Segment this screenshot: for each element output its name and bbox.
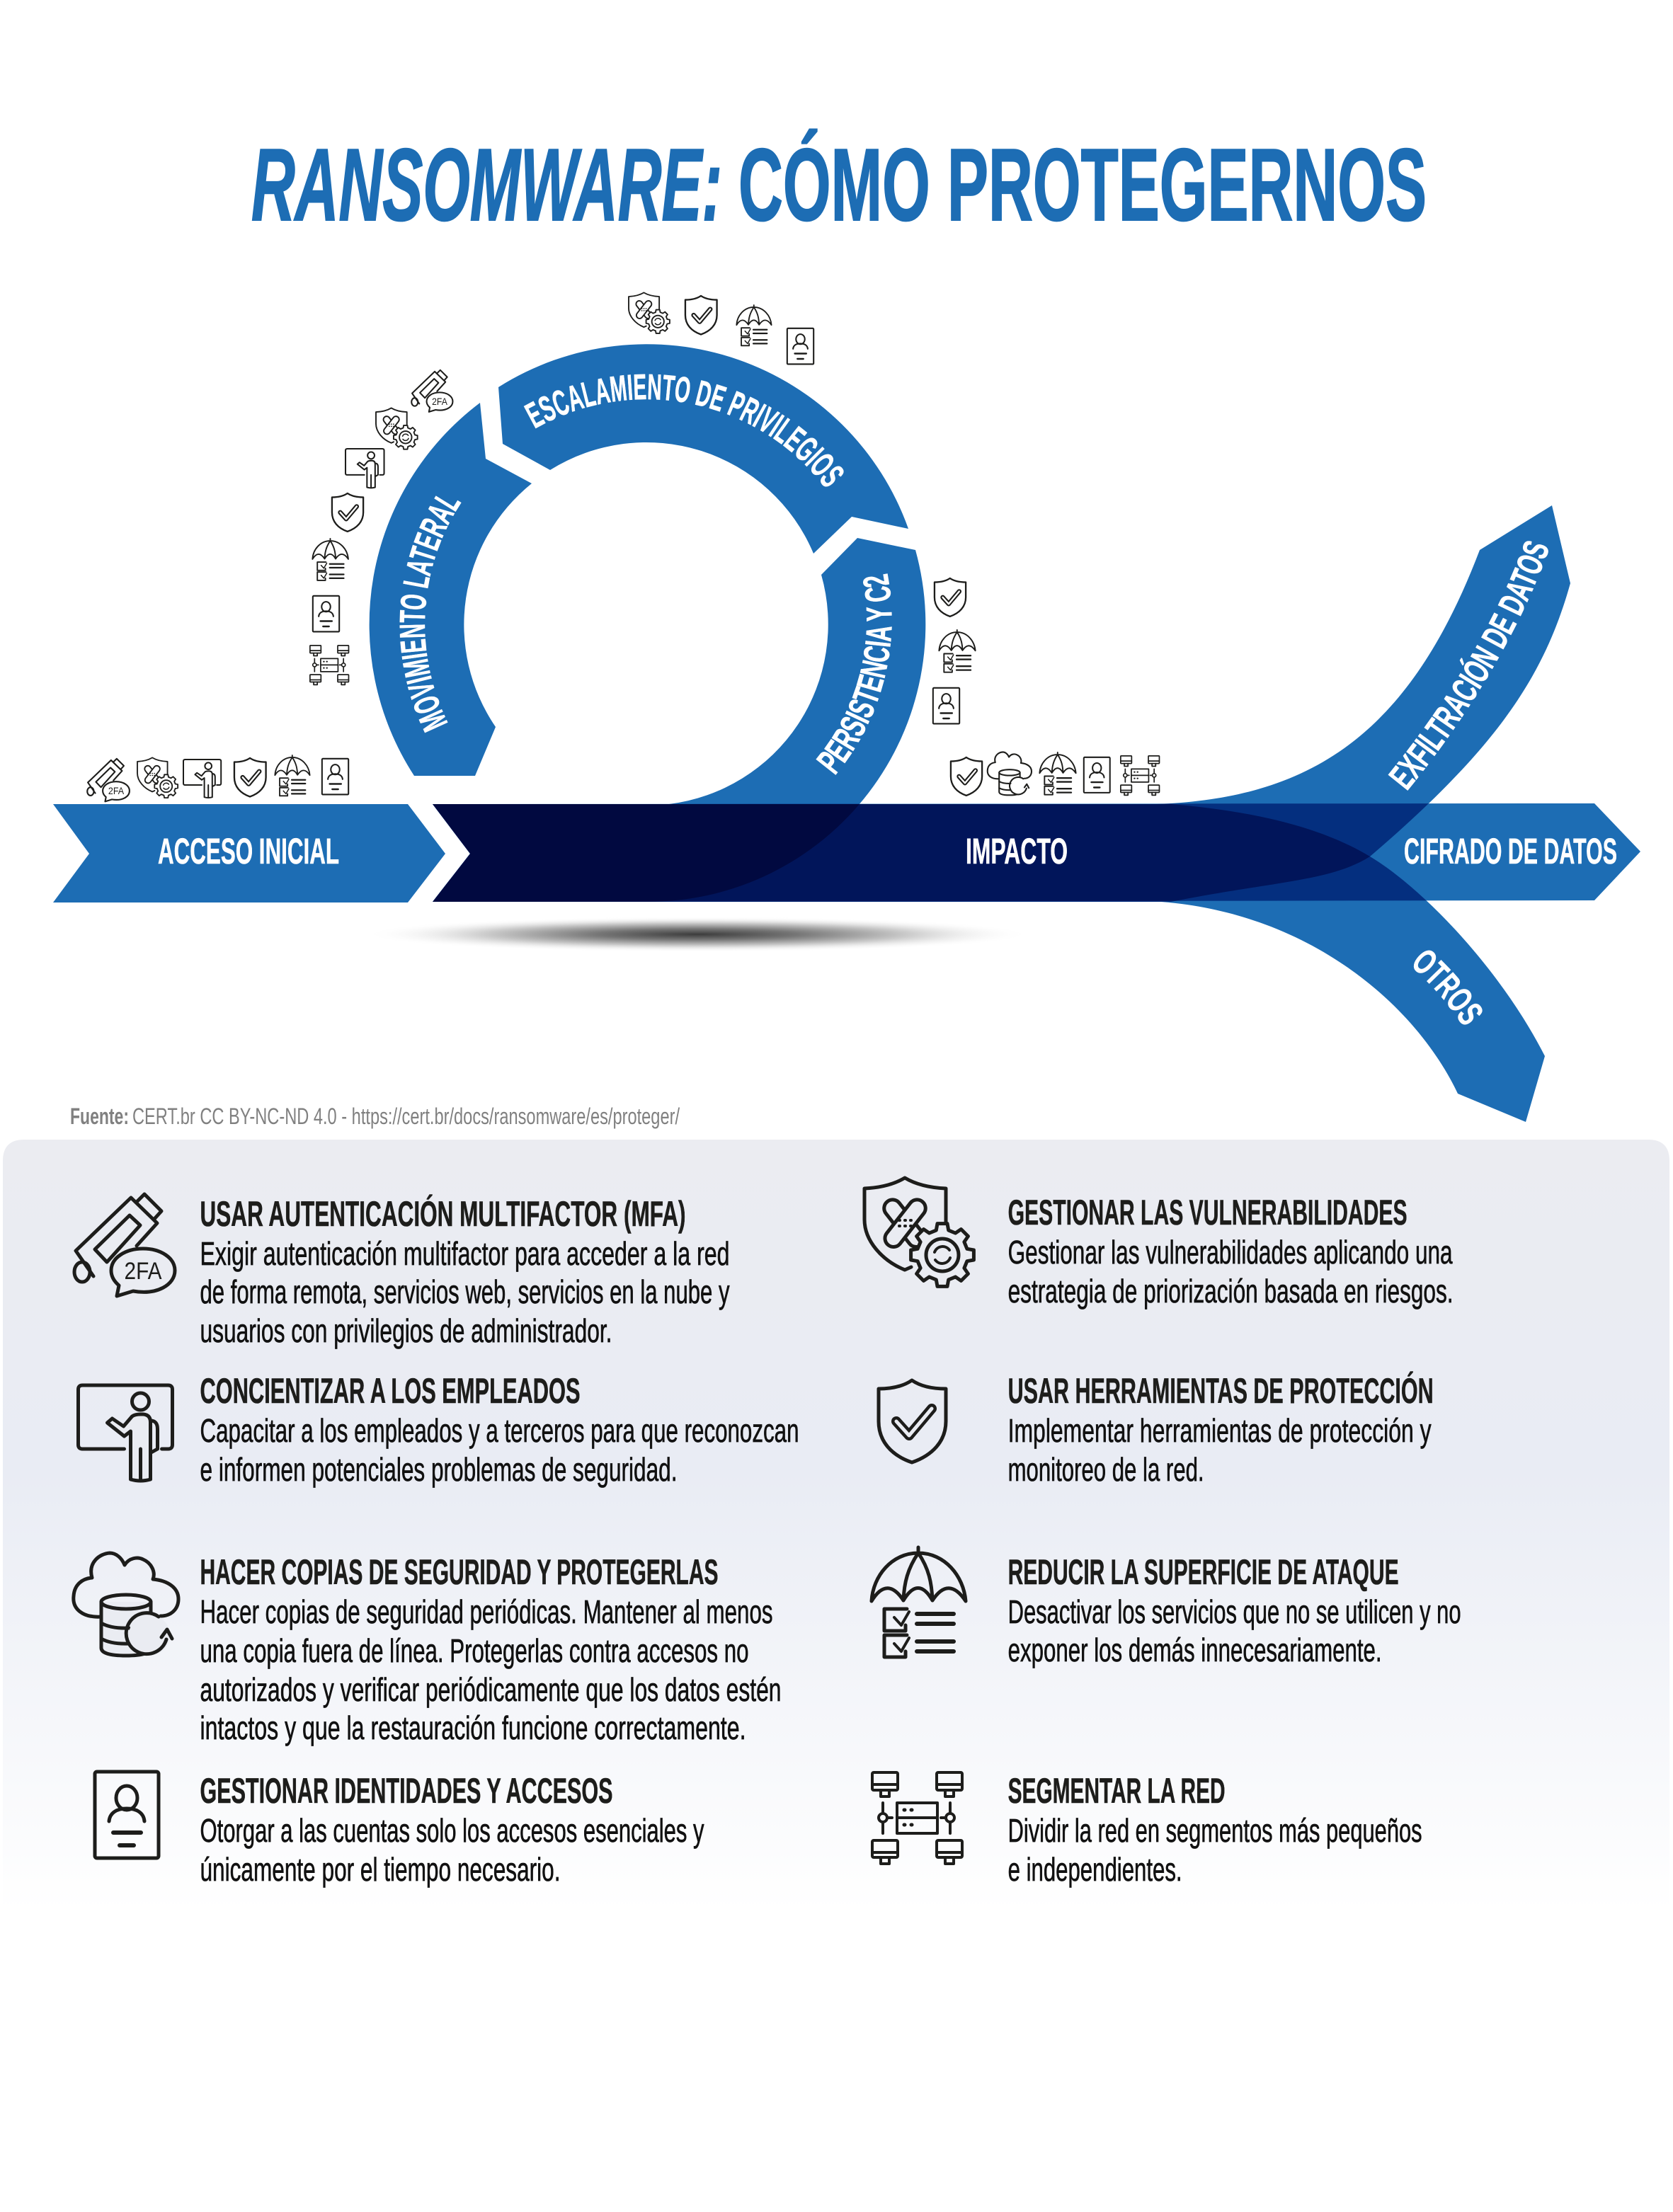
text block: [1008, 1812, 1422, 1888]
label: otros: OTROS: [1413, 950, 1483, 1025]
panel: recommendations background: [3, 1140, 1669, 1911]
text block: Desactivar los servicios que no se utilicen y no: [1008, 1593, 1461, 1630]
label: impacto: IMPACTO: [966, 831, 1068, 871]
icons: persistencia column: [933, 578, 976, 723]
text block: intactos y que la restauración funcione correctamente.: [200, 1709, 746, 1746]
icon: shield check: [879, 1380, 946, 1462]
panel: recommendations: [74, 1178, 1461, 1888]
icon: id card: [1084, 757, 1110, 793]
icon: id card: [322, 759, 348, 794]
item: MFA: [74, 1194, 729, 1349]
icon: umbrella checklist: [312, 539, 348, 580]
title: RANSOMWARE:: [251, 127, 722, 242]
text block: una copia fuera de línea. Protegerlas contra accesos no: [200, 1632, 749, 1669]
heading: HACER COPIAS DE SEGURIDAD Y PROTEGERLAS: [200, 1552, 719, 1592]
text block: usuarios con privilegios de administrador.: [200, 1312, 612, 1349]
icon: umbrella checklist: [872, 1547, 966, 1657]
heading: GESTIONAR IDENTIDADES Y ACCESOS: [200, 1771, 613, 1811]
item: attack surface: [872, 1547, 1461, 1668]
title: [251, 127, 1427, 242]
arrow: acceso inicial: [53, 804, 445, 902]
icon: network: [872, 1772, 962, 1864]
label: acceso inicial: ACCESO INICIAL: [158, 831, 339, 871]
icon: shield check: [935, 578, 966, 617]
icons: impacto row: [951, 752, 1159, 796]
icon: cloud database: [74, 1553, 178, 1656]
icon: umbrella checklist: [1039, 752, 1076, 795]
icon: 2FA key: 2FA: [108, 786, 125, 797]
item: protection tools: [879, 1371, 1434, 1488]
arc: escalamiento de privilegios: [498, 344, 908, 554]
icon: 2FA key: [411, 370, 452, 412]
icons: escalamiento row: [629, 292, 813, 364]
icons: movimiento lateral column: [310, 370, 452, 684]
text block: [200, 1812, 704, 1888]
text block: autorizados y verificar periódicamente que los datos estén: [200, 1671, 782, 1708]
icon: 2FA key: 2FA: [125, 1258, 162, 1285]
icon: cloud database: [988, 752, 1032, 795]
item: segment network: [872, 1771, 1422, 1888]
label: movimiento lateral: MOVIMIENTO LATERAL: [399, 495, 462, 733]
text block: Hacer copias de seguridad periódicas. Mantener al menos: [200, 1593, 773, 1630]
icon: umbrella checklist: [939, 630, 976, 672]
text block: [1008, 1234, 1454, 1310]
text block: de forma remota, servicios web, servicios en la nube y: [200, 1273, 729, 1310]
label: persistencia y C2: PERSISTENCIA Y C2: [816, 573, 892, 775]
heading: USAR AUTENTICACIÓN MULTIFACTOR (MFA): [200, 1194, 685, 1234]
source line: [70, 1104, 680, 1129]
text block: Capacitar a los empleados y a terceros para que reconozcan: [200, 1412, 799, 1449]
source line: CERT.br CC BY-NC-ND 4.0 - https://cert.br/docs/ransomware/es/proteger/: [132, 1104, 680, 1129]
text block: Dividir la red en segmentos más pequeños: [1008, 1812, 1422, 1849]
icon: umbrella checklist: [275, 755, 310, 796]
icon: shield with gear: [376, 408, 418, 449]
icon: presenter: [78, 1385, 173, 1481]
item: awareness: [78, 1371, 799, 1488]
icon: shield check: [234, 758, 266, 796]
label: escalamiento de privilegios: ESCALAMIENTO DE PRIVILEGIOS: [524, 374, 844, 487]
text block: únicamente por el tiempo necesario.: [200, 1851, 561, 1888]
text block: estrategia de priorización basada en riesgos.: [1008, 1273, 1454, 1310]
arrow: exfiltracion de datos: [433, 505, 1570, 902]
icon: id card: [313, 596, 339, 631]
icon: presenter: [183, 760, 221, 798]
text block: [200, 1235, 729, 1349]
arrow: otros: [433, 804, 1545, 1122]
label: exfiltracion de datos: EXFILTRACIÓN DE DATOS: [1388, 541, 1548, 791]
icon: id card: [933, 688, 959, 723]
icons: acceso inicial row: [87, 755, 348, 801]
item: vulnerabilities: [864, 1178, 1454, 1310]
heading: CONCIENTIZAR A LOS EMPLEADOS: [200, 1371, 581, 1411]
item: backups: [74, 1552, 781, 1746]
icon: presenter: [346, 449, 384, 488]
icon: id card: [787, 328, 813, 364]
arc: persistencia y C2: [433, 538, 925, 902]
icon: id card: [95, 1772, 159, 1858]
icon: shield check: [951, 757, 982, 796]
icon: 2FA key: 2FA: [432, 396, 447, 407]
text block: e informen potenciales problemas de seguridad.: [200, 1451, 677, 1488]
text block: Exigir autenticación multifactor para acceder a la red: [200, 1235, 729, 1272]
text block: [1008, 1593, 1461, 1668]
icon: shield with gear: [864, 1178, 973, 1286]
source line: Fuente:: [70, 1104, 129, 1129]
arrow: cifrado de datos: [433, 803, 1640, 902]
icon: umbrella checklist: [736, 305, 772, 345]
arc: movimiento lateral: [370, 403, 532, 776]
icon: 2FA key: [87, 759, 130, 801]
heading: GESTIONAR LAS VULNERABILIDADES: [1008, 1193, 1408, 1232]
heading: REDUCIR LA SUPERFICIE DE ATAQUE: [1008, 1552, 1399, 1592]
icon: 2FA key: [74, 1194, 175, 1296]
icon: shield check: [685, 296, 717, 334]
icon: network: [1121, 756, 1159, 795]
heading: SEGMENTAR LA RED: [1008, 1771, 1226, 1811]
text block: Otorgar a las cuentas solo los accesos esenciales y: [200, 1812, 704, 1849]
text block: [1008, 1412, 1432, 1488]
icon: shield with gear: [137, 757, 178, 798]
text block: Gestionar las vulnerabilidades aplicando una: [1008, 1234, 1453, 1271]
text block: monitoreo de la red.: [1008, 1451, 1204, 1488]
icon: shield check: [332, 493, 363, 532]
text block: e independientes.: [1008, 1851, 1182, 1888]
icon: shield with gear: [629, 292, 670, 333]
shadow under ribbon: [365, 917, 1030, 952]
text block: Implementar herramientas de protección y: [1008, 1412, 1432, 1449]
text block: exponer los demás innecesariamente.: [1008, 1632, 1382, 1668]
diagram: attack flow: [53, 344, 1640, 1122]
text block: [200, 1593, 782, 1746]
text block: [200, 1412, 799, 1488]
icon: network: [310, 646, 348, 684]
item: identities: [95, 1771, 704, 1888]
